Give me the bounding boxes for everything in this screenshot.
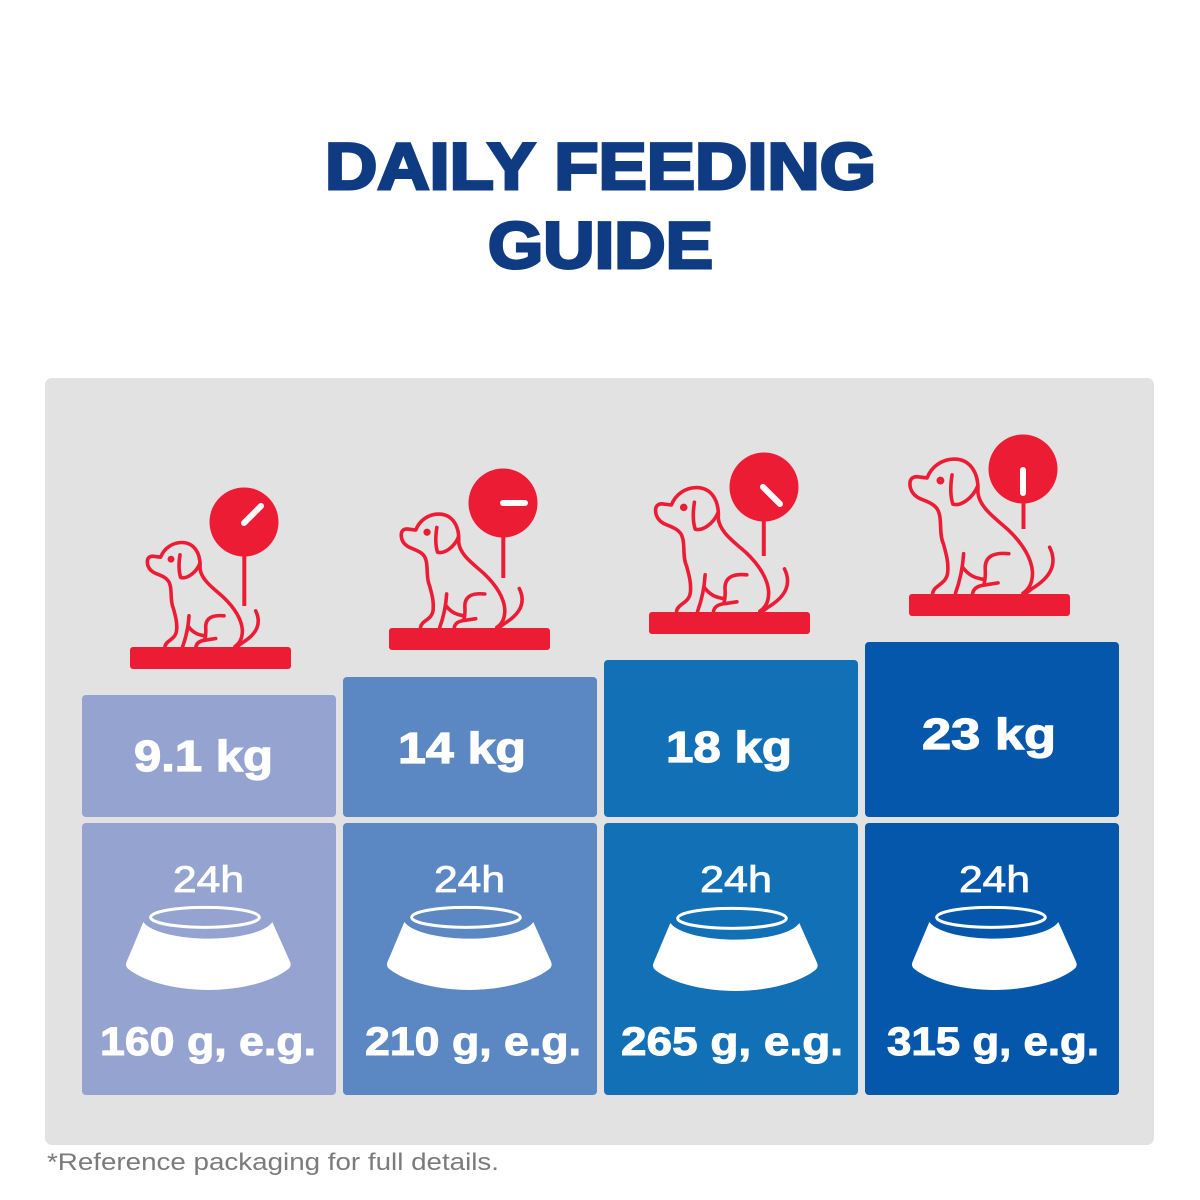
weight box: 14 kg: 14 kg [398, 724, 526, 773]
icon: large dog on scale [909, 434, 1070, 616]
portion box: 210 g: 24h [434, 859, 505, 900]
portion box: 315 g: 24h [959, 859, 1030, 900]
icon: medium-small dog on scale [389, 468, 550, 650]
portion box: 315 g [865, 823, 1119, 1095]
portion box: 160 g: 160 g, e.g. [100, 1020, 316, 1064]
portion box: 160 g [82, 823, 336, 1095]
portion box: 315 g: 315 g, e.g. [887, 1020, 1099, 1064]
icon: small dog on scale [130, 488, 291, 669]
title: DAILY FEEDING [325, 129, 876, 203]
portion box: 265 g: 24h [700, 859, 772, 900]
column: 18 kg [604, 452, 858, 1095]
portion box: 210 g: 210 g, e.g. [365, 1020, 581, 1064]
portion box: 160 g: 24h [173, 859, 244, 900]
weight box: 18 kg [604, 660, 858, 817]
weight box: 18 kg: 18 kg [666, 723, 792, 772]
portion box: 210 g [343, 823, 597, 1095]
icon: bowl [126, 907, 291, 990]
title: GUIDE [488, 208, 713, 282]
weight box: 9.1 kg [82, 695, 336, 817]
icon: bowl [653, 908, 818, 991]
title [325, 129, 876, 282]
column: 14 kg [343, 468, 597, 1095]
portion box: 265 g [604, 823, 858, 1095]
icon: bowl [912, 907, 1077, 990]
footnote: *Reference packaging for full details. [47, 1149, 499, 1176]
panel: feeding guide background [45, 378, 1154, 1145]
weight box: 23 kg: 23 kg [922, 710, 1056, 759]
icon: bowl [387, 907, 552, 990]
weight box: 9.1 kg: 9.1 kg [134, 732, 273, 781]
column: 9.1 kg [82, 488, 336, 1095]
weight box: 23 kg [865, 642, 1119, 817]
weight box: 14 kg [343, 677, 597, 817]
column: 23 kg [865, 434, 1119, 1095]
portion box: 265 g: 265 g, e.g. [621, 1020, 843, 1064]
icon: medium dog on scale [649, 452, 810, 634]
